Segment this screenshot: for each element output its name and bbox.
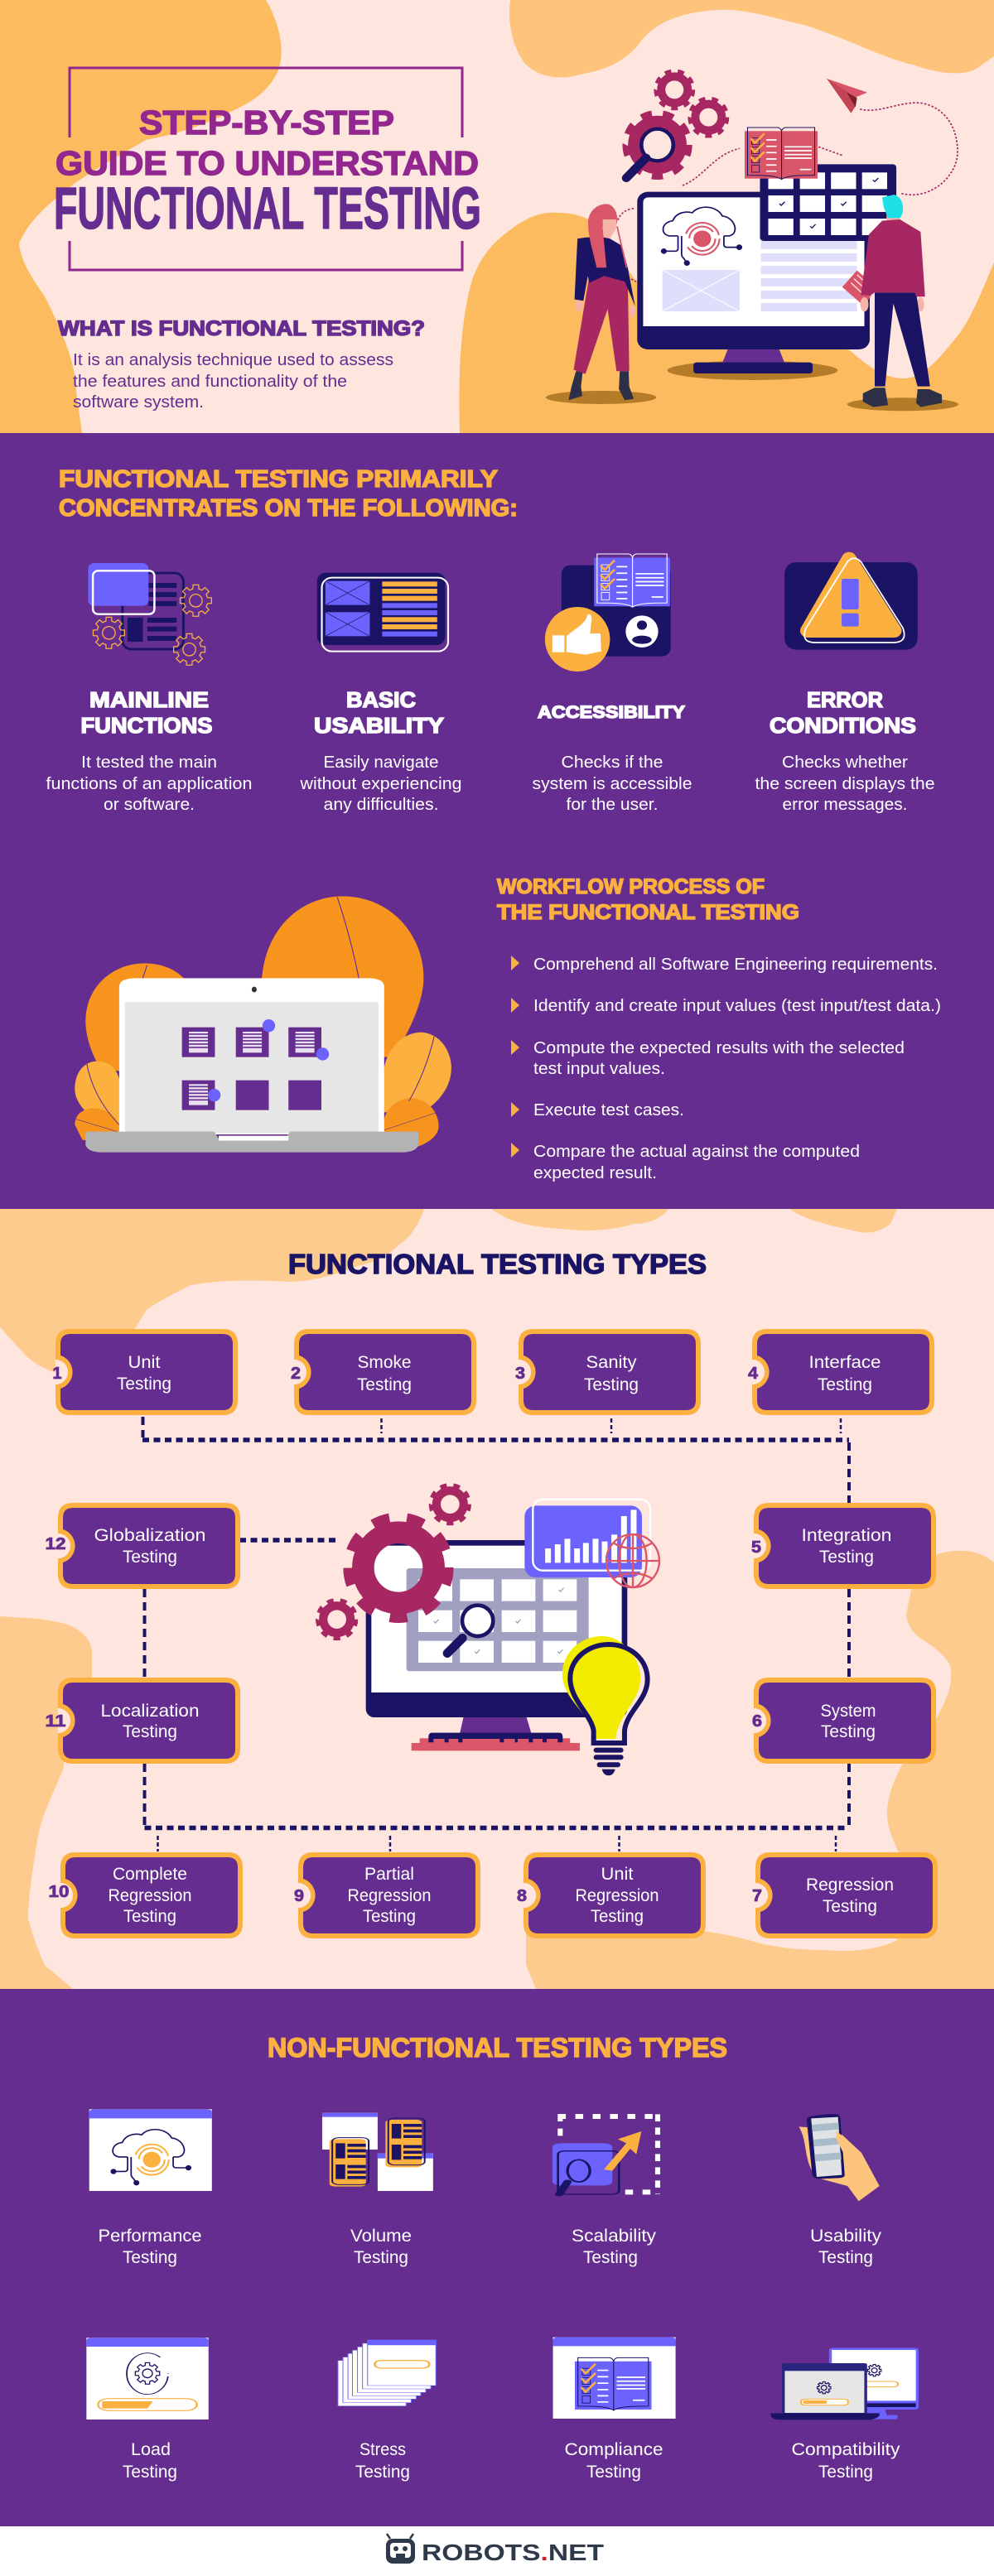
card: stress testing: Stress [359,2440,406,2459]
box 5: integration testing: 5 [751,1538,761,1557]
box 8: unit regression testing: 8 [517,1887,527,1905]
box 1: unit testing: Unit [128,1353,161,1372]
card: compatibility testing: Testing [818,2463,873,2482]
section: non-functional background [0,1989,994,2526]
box 10: complete regression testing: 10 [48,1883,70,1901]
box 5: integration testing: Testing [819,1548,874,1567]
heading: workflow process [497,875,799,924]
icon: warning triangle [784,558,918,650]
list: workflow steps: Compute the expected results with the selected [533,1039,905,1057]
box 11: localization testing [45,1678,240,1764]
box 7: regression testing: Testing [823,1897,877,1916]
icon: robot head [386,2534,415,2564]
card: volume testing: Testing [354,2248,408,2267]
monitor [637,192,870,373]
card: performance testing: Performance [98,2227,202,2246]
box 1: unit testing: 1 [53,1365,61,1383]
logo: robots.net [386,2534,604,2565]
panel: basic usability: USABILITY [314,713,444,738]
figure: woman [568,204,635,400]
box 6: system testing: Testing [821,1722,876,1741]
panel: mainline functions: functions of an application [46,775,252,793]
list: workflow steps: Identify and create input values (test input/test data.) [533,997,941,1015]
card: performance testing [89,2109,212,2267]
section: purple background [0,433,994,1209]
box 11: localization testing: 11 [45,1712,66,1731]
panel: basic usability [299,573,462,814]
icon: mainline functions [88,563,211,665]
text block: definition: the features and functionality of the [73,373,347,391]
panel: accessibility [532,554,692,814]
box 2: smoke testing: Testing [357,1375,412,1394]
envelope placeholder [663,270,740,311]
box 12: globalization testing: Globalization [94,1526,205,1545]
dashed flight paths [617,103,958,282]
box 7: regression testing: 7 [752,1887,762,1905]
box 2: smoke testing [291,1329,476,1415]
box 4: interface testing: Interface [808,1353,881,1372]
chart card [524,1500,650,1577]
text block: definition: software system. [73,393,204,412]
box 9: partial regression testing: Regression [348,1886,431,1905]
box 3: sanity testing: Testing [584,1375,639,1394]
card: scalability testing [552,2114,660,2267]
illustration: laptop with leaves [75,896,451,1153]
box 2: smoke testing: 2 [291,1365,301,1383]
box 8: unit regression testing: Unit [601,1865,634,1884]
box 4: interface testing [748,1329,934,1415]
section: functional testing types background [0,1209,994,1989]
panel: basic usability: BASIC [346,687,416,712]
figure: man [842,195,942,407]
box 10: complete regression testing: Testing [123,1907,176,1926]
title: GUIDE TO UNDERSTAND [55,144,479,182]
card: scalability testing: Scalability [572,2227,657,2246]
icon: stacked windows [338,2340,436,2406]
list: workflow steps: test input values. [533,1060,665,1078]
box 10: complete regression testing: Regression [108,1886,192,1905]
icon: hand with phone [799,2114,880,2201]
card: compliance testing [553,2338,676,2482]
panel: accessibility: for the user. [567,796,658,814]
panel: error conditions: CONDITIONS [770,713,916,738]
box 11: localization testing: Testing [123,1722,177,1741]
title: STEP-BY-STEP [139,104,394,142]
text block: definition [73,351,393,412]
card: scalability testing: Testing [583,2248,638,2267]
heading: what is functional testing: WHAT IS FUNCTIONAL TESTING? [58,317,425,340]
box 8: unit regression testing [517,1852,706,1938]
card: compatibility testing [771,2347,919,2482]
panel: mainline functions: FUNCTIONS [81,713,212,738]
heading: concentrates: CONCENTRATES ON THE FOLLOWING: [59,495,518,522]
card: compliance testing: Testing [586,2463,641,2482]
list: workflow steps: expected result. [533,1164,657,1182]
list: workflow steps: Compare the actual against the computed [533,1143,860,1161]
box 6: system testing [752,1678,936,1764]
heading: functional testing types: FUNCTIONAL TESTING TYPES [288,1249,707,1279]
box 8: unit regression testing: Testing [591,1907,644,1926]
hero illustration [546,71,958,411]
box 12: globalization testing [45,1503,240,1589]
card: usability testing: Usability [810,2227,882,2246]
shadows [546,361,958,411]
panel: basic usability: Easily navigate [323,754,439,772]
box 1: unit testing [53,1329,238,1415]
card: stress testing: Testing [355,2463,410,2482]
box 8: unit regression testing: Regression [575,1886,659,1905]
card: load testing [86,2338,209,2482]
icon: load [86,2338,209,2420]
box 2: smoke testing: Smoke [358,1353,411,1372]
icon: gears and magnifier [626,71,727,178]
footer background [0,2526,994,2576]
box 10: complete regression testing [48,1852,243,1938]
tiles [182,1028,321,1110]
title frame [70,68,462,270]
box 3: sanity testing: Sanity [586,1353,637,1372]
icon: book [745,128,818,180]
icon: magnifier [447,1606,493,1654]
panel: mainline functions: or software. [104,796,195,814]
title: FUNCTIONAL TESTING [54,176,481,242]
icon: monitor and laptop [771,2347,919,2420]
card: usability testing: Testing [818,2248,873,2267]
card: stress testing [338,2340,436,2482]
wordmark: ROBOTS .NET [422,2540,604,2565]
box 4: interface testing: Testing [818,1375,872,1394]
box 12: globalization testing: Testing [123,1548,177,1567]
panel: error conditions: ERROR [807,687,883,712]
list: workflow steps [511,956,941,1182]
heading: workflow process: THE FUNCTIONAL TESTING [497,901,799,924]
panel: error conditions: error messages. [782,796,908,814]
heading: non-functional testing types: NON-FUNCTIONAL TESTING TYPES [268,2033,727,2063]
panel: mainline functions: It tested the main [81,754,217,772]
box 1: unit testing: Testing [117,1375,171,1394]
card: compliance testing: Compliance [565,2440,663,2459]
box 4: interface testing: 4 [748,1365,759,1383]
panel: error conditions: Checks whether [782,754,908,772]
monitor [366,1540,627,1750]
icon: basic usability [317,573,448,652]
icon: accessibility [545,554,671,672]
panel: error conditions [755,558,934,814]
box 7: regression testing: Regression [806,1875,894,1895]
card: load testing: Load [131,2440,171,2459]
list: workflow steps: Comprehend all Software Engineering requirements. [533,956,938,974]
icon: volume [322,2113,433,2191]
icon: globe [606,1534,659,1587]
box 9: partial regression testing: Testing [363,1907,416,1926]
card: volume testing [322,2113,433,2267]
icon: paper plane [827,79,867,113]
box 5: integration testing [751,1503,936,1589]
box 9: partial regression testing: Partial [364,1865,414,1884]
panel: accessibility: ACCESSIBILITY [538,703,685,722]
box 9: partial regression testing: 9 [294,1887,304,1905]
box 11: localization testing: Localization [101,1702,199,1721]
box 5: integration testing: Integration [802,1526,891,1545]
panel: error conditions: the screen displays the [755,775,934,793]
heading: workflow process: WORKFLOW PROCESS OF [497,875,765,898]
card: load testing: Testing [123,2463,177,2482]
icon: compliance [553,2338,676,2419]
panel: accessibility: system is accessible [532,775,692,793]
heading: concentrates [59,466,518,522]
connector lines [142,1417,849,1851]
icon: gears [318,1485,469,1639]
panel: basic usability: any difficulties. [323,796,439,814]
list: workflow steps: Execute test cases. [533,1101,684,1119]
card: volume testing: Volume [350,2227,412,2246]
heading: concentrates: FUNCTIONAL TESTING PRIMARILY [59,466,498,493]
box 10: complete regression testing: Complete [113,1865,187,1884]
icon: performance [89,2109,212,2191]
box 3: sanity testing: 3 [515,1365,525,1383]
box 6: system testing: 6 [752,1712,762,1731]
section: hero background [0,0,994,433]
panel: mainline functions: MAINLINE [89,687,209,712]
box 6: system testing: System [820,1702,876,1721]
box 7: regression testing [752,1852,938,1938]
calendar [760,164,896,241]
icon: scalability [552,2114,660,2194]
title [54,104,481,242]
card: compatibility testing: Compatibility [792,2440,900,2459]
text block: definition: It is an analysis technique used to assess [73,351,393,369]
panel: mainline functions [46,563,252,814]
box 9: partial regression testing [294,1852,480,1938]
box 3: sanity testing [515,1329,701,1415]
icon: light bulb [562,1636,648,1775]
central illustration: monitor, gears, bulb [318,1485,659,1775]
card: usability testing [799,2114,882,2267]
panel: basic usability: without experiencing [299,775,462,793]
box 12: globalization testing: 12 [45,1535,66,1553]
card: performance testing: Testing [123,2248,177,2267]
panel: accessibility: Checks if the [562,754,663,772]
